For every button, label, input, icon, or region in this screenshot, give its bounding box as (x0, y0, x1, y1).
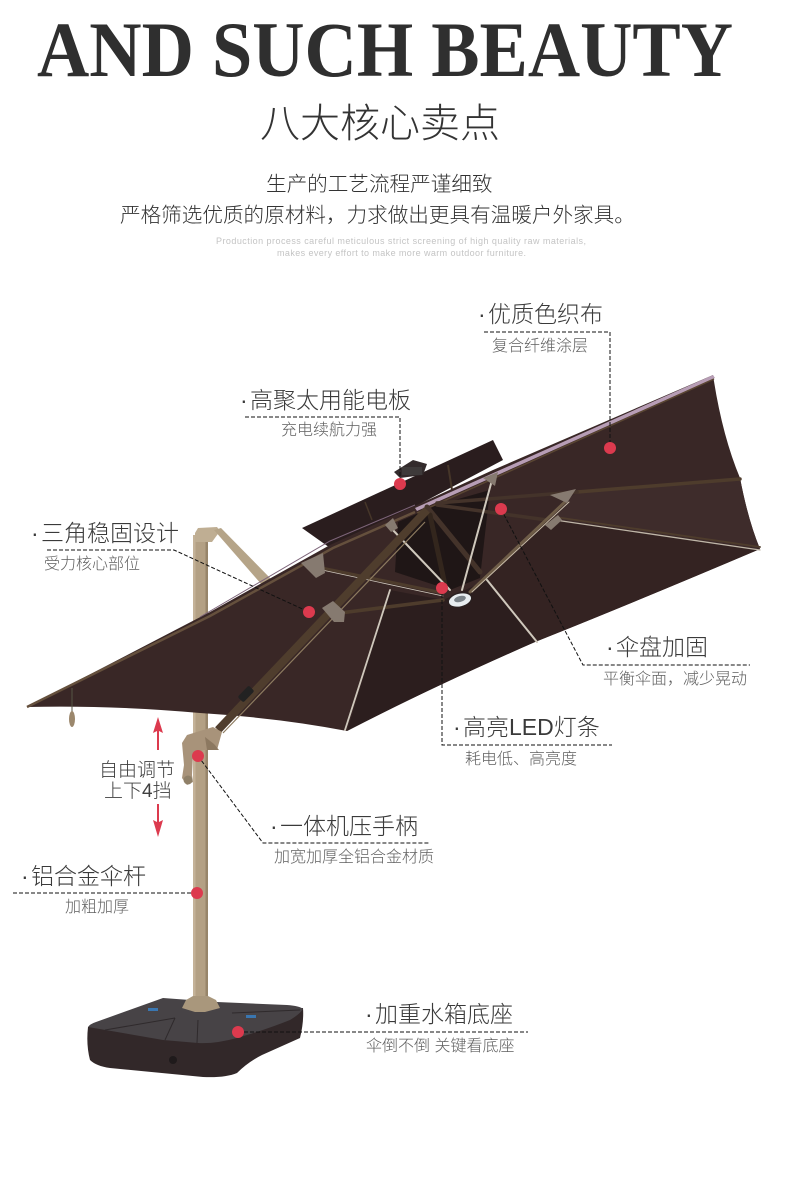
main arm (218, 510, 427, 733)
callout: triangle: 三角稳固设计 (41, 520, 179, 546)
callout: led: 高亮LED灯条 (463, 714, 600, 740)
title: AND SUCH BEAUTY (37, 6, 733, 93)
callout: pole (13, 863, 203, 916)
callout: base (232, 1001, 528, 1055)
callout: led: 耗电低、高亮度 (465, 750, 577, 768)
led light (447, 590, 473, 610)
english caption: Production process careful meticulous strict screening of high quality raw materials, (216, 236, 586, 246)
water tank base (87, 996, 303, 1077)
callout: triangle (31, 520, 315, 618)
rib brackets (301, 472, 576, 622)
callout: triangle: · (31, 520, 39, 546)
callout: handle: 加宽加厚全铝合金材质 (274, 848, 434, 866)
callout: pole: · (21, 863, 29, 889)
callout: base: 加重水箱底座 (375, 1001, 513, 1027)
adjust label: 上下4挡 (104, 780, 172, 802)
callout: solar: · (240, 387, 248, 413)
solar panel (302, 440, 503, 550)
callout: led (436, 582, 612, 768)
crank handle (182, 727, 222, 785)
callout: base: 伞倒不倒 关键看底座 (366, 1037, 514, 1055)
adjust label: 自由调节 (99, 759, 175, 781)
callout: fabric (478, 301, 616, 454)
callout: hub: · (606, 634, 614, 660)
callout: hub (495, 503, 750, 688)
callout: pole: 铝合金伞杆 (31, 863, 146, 889)
pole top bracket and strut (195, 527, 312, 630)
callout: handle (192, 750, 434, 866)
intro text: 生产的工艺流程严谨细致 (266, 173, 493, 196)
callout: fabric: 优质色织布 (488, 301, 603, 327)
adjust label (99, 759, 175, 802)
callout: fabric: · (478, 301, 486, 327)
intro text: 严格筛选优质的原材料，力求做出更具有温暖户外家具。 (120, 204, 635, 227)
callout: led: · (453, 714, 461, 740)
callout: hub: 平衡伞面，减少晃动 (603, 670, 747, 688)
english caption: makes every effort to make more warm outdoor furniture. (277, 248, 526, 258)
umbrella product illustration (27, 375, 760, 1077)
callout: solar: 充电续航力强 (281, 421, 377, 439)
callout: solar (240, 387, 411, 490)
callout: fabric: 复合纤维涂层 (492, 337, 588, 355)
callout: solar: 高聚太用能电板 (250, 387, 411, 413)
callout: hub: 伞盘加固 (616, 634, 708, 660)
pole (193, 535, 208, 1000)
canopy (27, 375, 760, 731)
callout: pole: 加粗加厚 (65, 898, 129, 916)
callout: handle: 一体机压手柄 (280, 813, 418, 839)
callout: handle: · (270, 813, 278, 839)
callout: triangle: 受力核心部位 (44, 555, 140, 573)
canopy ribs (317, 479, 760, 730)
callout: base: · (365, 1001, 373, 1027)
intro text (120, 173, 635, 227)
subtitle: 八大核心卖点 (260, 102, 500, 146)
english caption (216, 236, 586, 258)
pull cord (69, 688, 75, 727)
adjust arrows (153, 717, 163, 837)
